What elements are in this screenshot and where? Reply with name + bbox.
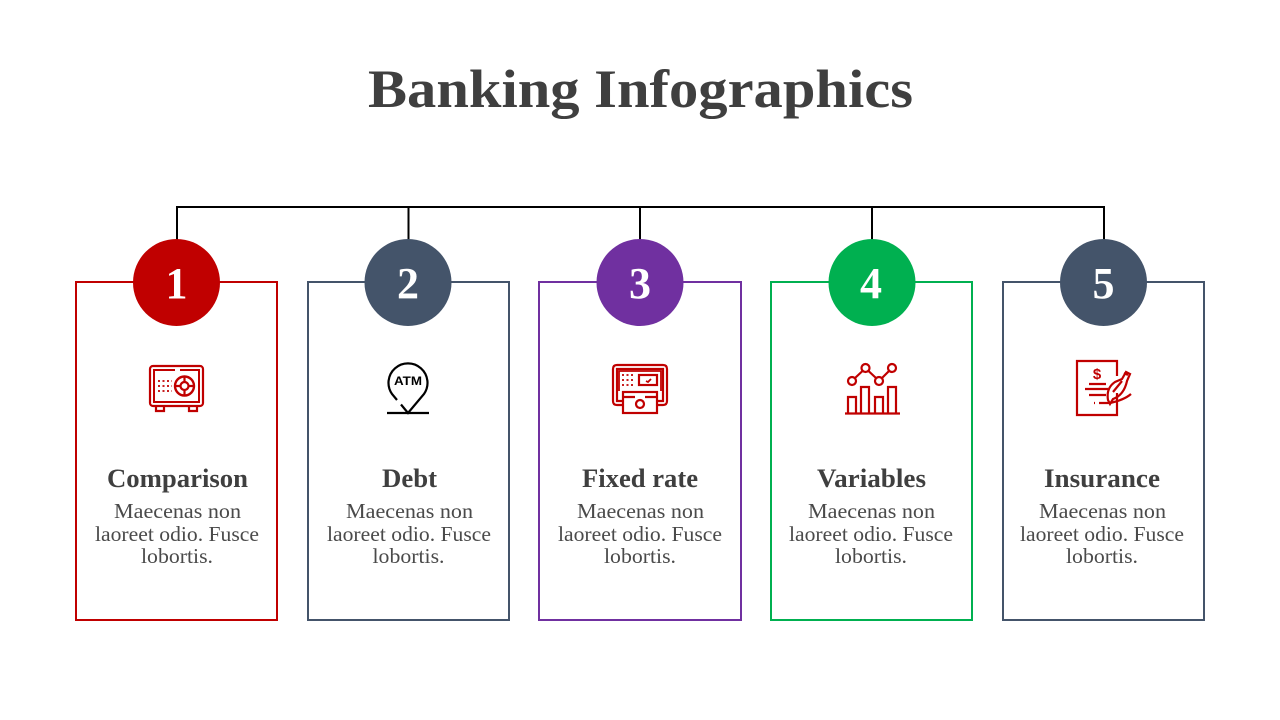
text block 3 <box>558 499 722 568</box>
heading: Debt: Debt <box>382 464 437 493</box>
heading: Variables: Variables <box>817 464 926 493</box>
number badge 1: 1 <box>166 259 188 308</box>
text block 5: Maecenas non <box>1039 499 1167 523</box>
text block 3: Maecenas non <box>577 499 705 523</box>
icon: signed document: $ <box>1093 366 1102 383</box>
heading: Insurance: Insurance <box>1044 464 1160 493</box>
text block 1: Maecenas non <box>114 499 242 523</box>
text block 2: lobortis. <box>372 544 444 568</box>
text block 2 <box>327 499 491 568</box>
number badge 5: 5 <box>1092 259 1114 308</box>
text block 4: lobortis. <box>835 544 907 568</box>
connector lines <box>177 207 1104 240</box>
card outline 3 <box>539 282 741 620</box>
text block 4: Maecenas non <box>808 499 936 523</box>
text block 5: lobortis. <box>1066 544 1138 568</box>
panel: variables <box>771 239 972 620</box>
text block 2: Maecenas non <box>346 499 474 523</box>
text block 3: laoreet odio. Fusce <box>558 522 722 546</box>
panel: comparison <box>76 239 277 620</box>
title: Banking Infographics <box>368 59 913 119</box>
number badge 3 <box>596 239 684 326</box>
number badge 4: 4 <box>860 259 882 308</box>
icon: bar and line chart <box>845 364 900 414</box>
heading: Fixed rate: Fixed rate <box>582 464 698 493</box>
icon: signed document <box>1077 361 1131 415</box>
text block 1 <box>95 499 259 568</box>
number badge 4 <box>828 239 916 326</box>
panel: fixed rate <box>539 239 741 620</box>
text block 1: lobortis. <box>141 544 213 568</box>
number badge 3: 3 <box>629 259 651 308</box>
number badge 1 <box>133 239 220 326</box>
card outline 4 <box>771 282 972 620</box>
heading: Comparison: Comparison <box>107 464 249 493</box>
number badge 5 <box>1060 239 1147 326</box>
number badge 2: 2 <box>397 259 419 308</box>
panel: debt <box>308 239 509 620</box>
icon: ATM pin: ATM <box>394 374 422 388</box>
card outline 5 <box>1003 282 1204 620</box>
text block 5: laoreet odio. Fusce <box>1020 522 1184 546</box>
text block 4: laoreet odio. Fusce <box>789 522 953 546</box>
text block 4 <box>789 499 953 568</box>
panel: insurance <box>1003 239 1204 620</box>
text block 1: laoreet odio. Fusce <box>95 522 259 546</box>
text block 3: lobortis. <box>604 544 676 568</box>
card outline 2 <box>308 282 509 620</box>
icon: safe <box>150 366 203 411</box>
number badge 2 <box>364 239 452 326</box>
text block 5 <box>1020 499 1184 568</box>
icon: ATM pin <box>387 363 429 413</box>
icon: bank machine <box>613 365 667 413</box>
text block 2: laoreet odio. Fusce <box>327 522 491 546</box>
card outline 1 <box>76 282 277 620</box>
